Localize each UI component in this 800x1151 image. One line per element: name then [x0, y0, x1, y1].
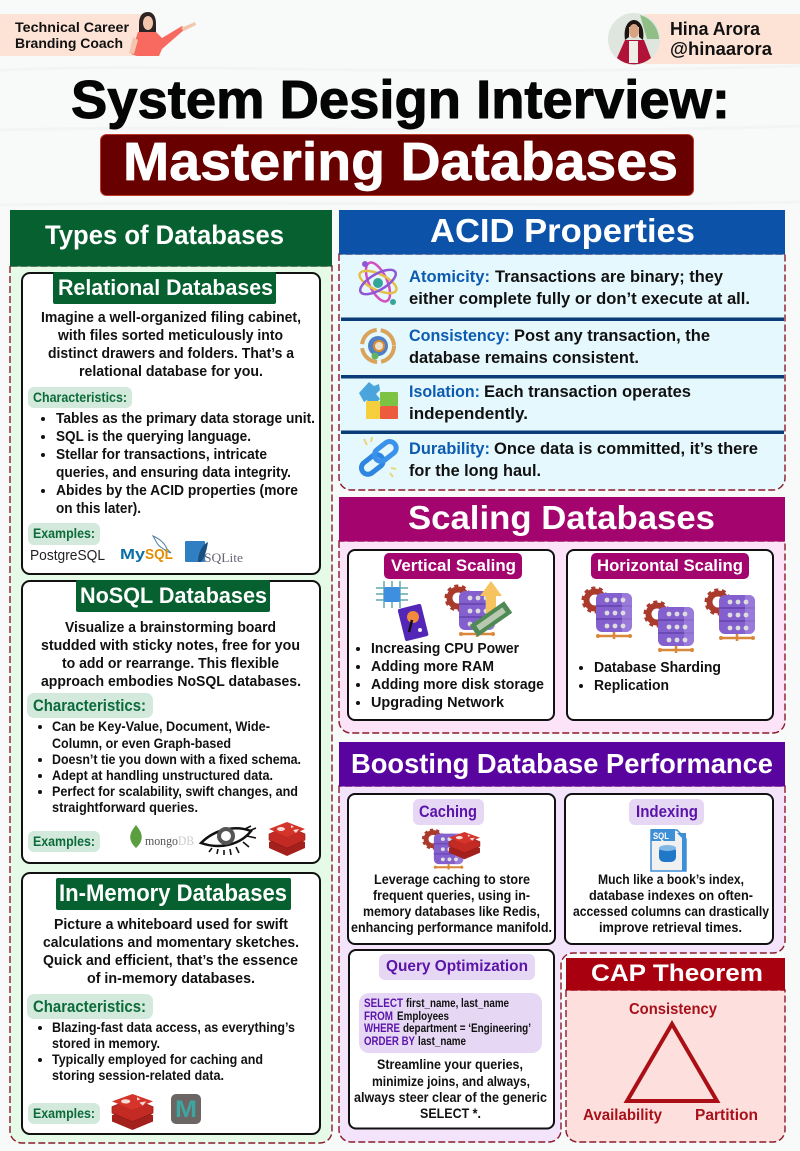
- card: in-memory databases: Quick and efficient, that’s the essence: [43, 952, 298, 969]
- panel: cap theorem: [566, 958, 785, 1142]
- card: in-memory databases: Characteristics:: [33, 998, 146, 1016]
- card: query optimization: [349, 950, 554, 1128]
- text: durability: for the long haul.: [409, 461, 541, 480]
- subtitle banner: Mastering Databases: [123, 132, 678, 192]
- icon: database servers: [583, 588, 755, 653]
- icon: cache server: [423, 830, 480, 870]
- code sample: WHERE: [364, 1023, 400, 1035]
- text: isolation: independently.: [409, 404, 528, 423]
- card: in-memory databases: In-Memory Databases: [59, 880, 287, 907]
- card: relational databases: Stellar for transactions, intricate: [56, 446, 267, 463]
- text: atomicity: either complete fully or don’t execute at all.: [409, 289, 750, 308]
- card: caching: frequent queries, using in-: [373, 887, 530, 903]
- badge: author: @hinaarora: [670, 39, 773, 59]
- triangle: [627, 1024, 717, 1101]
- card: vertical scaling: Increasing CPU Power: [371, 640, 519, 657]
- card: caching: enhancing performance manifold.: [351, 919, 552, 935]
- code sample: [359, 993, 542, 1053]
- icon: sql document: SQL: [653, 831, 669, 841]
- card: nosql databases: Visualize a brainstorming board: [65, 619, 276, 636]
- icon: hard disk: [397, 604, 429, 641]
- logo: redis: [269, 822, 305, 856]
- card: indexing: Indexing: [636, 803, 698, 821]
- card: in-memory databases: storing session-related data.: [52, 1067, 224, 1083]
- icon: atom: [356, 259, 400, 305]
- card: horizontal scaling: Replication: [594, 677, 669, 694]
- card: in-memory databases: of in-memory databases.: [87, 970, 255, 987]
- card: horizontal scaling: Database Sharding: [594, 659, 721, 676]
- card: relational databases: Characteristics:: [33, 389, 127, 405]
- card: relational databases: distinct drawers and folders. That’s a: [48, 345, 295, 362]
- card: vertical scaling: Adding more disk storage: [371, 676, 544, 693]
- card: indexing: database indexes on often-: [589, 887, 753, 903]
- card: caching: [348, 794, 555, 944]
- badge: technical career branding coach: Technical Career: [15, 19, 130, 35]
- text: isolation: [409, 382, 691, 423]
- text: durability: Once data is committed, it’s there: [494, 439, 758, 458]
- card: relational databases: Abides by the ACID properties (more: [56, 482, 298, 499]
- card: relational databases: with files sorted meticulously into: [57, 327, 283, 344]
- card: nosql databases: approach embodies NoSQL databases.: [41, 673, 301, 690]
- text: durability: [409, 439, 758, 480]
- card: relational databases: on this later).: [56, 500, 141, 517]
- card: nosql databases: Adept at handling unstructured data.: [52, 767, 273, 783]
- text: atomicity: Transactions are binary; they: [495, 267, 724, 286]
- icon: consistency gear: [362, 330, 394, 362]
- panel: acid properties: [339, 210, 785, 490]
- card: vertical scaling: Upgrading Network: [371, 694, 505, 711]
- text: consistency: Consistency:: [409, 326, 510, 345]
- card: nosql databases: NoSQL Databases: [80, 583, 267, 608]
- card: in-memory databases: [22, 873, 320, 1134]
- text: durability: Durability:: [409, 439, 490, 458]
- code sample: last_name: [418, 1036, 466, 1048]
- code sample: SELECT: [364, 998, 403, 1010]
- card: nosql databases: to add or rearrange. This flexible: [62, 655, 279, 672]
- icon: coach illustration: [129, 12, 196, 56]
- code sample: ORDER BY: [364, 1036, 415, 1048]
- card: nosql databases: Characteristics:: [33, 697, 146, 715]
- card: nosql databases: Doesn’t tie you down with a fixed schema.: [52, 751, 301, 767]
- card: nosql databases: Perfect for scalability, swift changes, and: [52, 783, 298, 799]
- text: atomicity: [409, 267, 750, 308]
- card: vertical scaling: Adding more RAM: [371, 658, 494, 675]
- card: vertical scaling: [348, 550, 554, 720]
- card: indexing: improve retrieval times.: [599, 919, 742, 935]
- logo: mysql: [120, 536, 173, 563]
- card: query optimization: always steer clear of the generic: [354, 1089, 547, 1105]
- icon: sql document: [651, 829, 686, 871]
- heading: scaling databases: Scaling Databases: [408, 499, 715, 536]
- logo: sqlite: [185, 541, 243, 565]
- logo: mongodb: DB: [178, 833, 194, 848]
- card: horizontal scaling: Horizontal Scaling: [597, 557, 743, 575]
- icon: cpu chip: [376, 581, 408, 608]
- card: caching: memory databases like Redis,: [363, 903, 540, 919]
- label: partition: Partition: [695, 1107, 758, 1124]
- text: isolation: Each transaction operates: [484, 382, 691, 401]
- badge: author: Hina Arora: [670, 19, 761, 39]
- logo: memcached: M: [175, 1096, 197, 1123]
- card: relational databases: Examples:: [33, 525, 95, 541]
- card: in-memory databases: calculations and momentary sketches.: [43, 934, 299, 951]
- code sample: FROM: [364, 1011, 393, 1023]
- logo: mysql: SQL: [145, 546, 173, 563]
- label: availability: Availability: [583, 1107, 662, 1124]
- heading: cap theorem: CAP Theorem: [591, 960, 763, 987]
- panel: boosting database performance: [339, 742, 785, 1142]
- badge: technical career branding coach: [0, 12, 196, 56]
- text: consistency: database remains consistent.: [409, 348, 639, 367]
- title: [71, 70, 730, 196]
- heading: types of databases: Types of Databases: [45, 220, 284, 250]
- card: indexing: accessed columns can drastically: [573, 903, 769, 919]
- logo: mysql: My: [120, 546, 146, 563]
- label: consistency: Consistency: [629, 1001, 717, 1018]
- card: indexing: Much like a book’s index,: [598, 871, 744, 887]
- card: in-memory databases: Picture a whiteboard used for swift: [54, 916, 288, 933]
- card: in-memory databases: Blazing-fast data access, as everything’s: [52, 1019, 295, 1035]
- logo: mongodb: mongo: [145, 833, 178, 848]
- card: indexing: [565, 794, 773, 944]
- card: vertical scaling: Vertical Scaling: [391, 557, 516, 575]
- code sample: department = ‘Engineering’: [403, 1023, 531, 1035]
- badge: author: [608, 13, 800, 65]
- text: atomicity: Atomicity:: [409, 267, 490, 286]
- badge: technical career branding coach: Branding Coach: [15, 35, 123, 51]
- heading: acid properties: ACID Properties: [430, 212, 695, 249]
- card: relational databases: SQL is the querying language.: [56, 428, 251, 445]
- card: in-memory databases: stored in memory.: [52, 1035, 160, 1051]
- logo: mongodb: [130, 825, 194, 848]
- logo: memcached: [171, 1094, 201, 1124]
- card: in-memory databases: Examples:: [33, 1105, 95, 1121]
- card: nosql databases: Column, or even Graph-based: [52, 735, 231, 751]
- panel: types of databases: [10, 210, 332, 1143]
- card: in-memory databases: Typically employed for caching and: [52, 1051, 263, 1067]
- logo: cassandra eye: [201, 826, 256, 855]
- card: nosql databases: studded with sticky notes, free for you: [41, 637, 300, 654]
- card: query optimization: Streamline your queries,: [377, 1056, 523, 1072]
- card: nosql databases: Can be Key-Value, Document, Wide-: [52, 718, 270, 734]
- card: relational databases: Relational Databases: [58, 275, 273, 300]
- card: relational databases: Imagine a well-organized filing cabinet,: [41, 309, 301, 326]
- card: nosql databases: [22, 580, 320, 863]
- code sample: first_name, last_name: [406, 998, 509, 1010]
- code sample: Employees: [397, 1011, 449, 1023]
- panel: scaling databases: [339, 497, 785, 733]
- card: relational databases: [22, 272, 320, 574]
- card: caching: Leverage caching to store: [374, 871, 530, 887]
- logo: sqlite: SQLite: [204, 550, 243, 565]
- card: relational databases: queries, and ensuring data integrity.: [56, 464, 291, 481]
- text: consistency: [409, 326, 710, 367]
- card: relational databases: Tables as the primary data storage unit.: [56, 410, 315, 427]
- text: consistency: Post any transaction, the: [514, 326, 710, 345]
- card: horizontal scaling: [567, 550, 773, 720]
- text: isolation: Isolation:: [409, 382, 480, 401]
- card: query optimization: Query Optimization: [386, 958, 528, 975]
- icon: chain link: [359, 437, 399, 477]
- title: System Design Interview:: [71, 70, 730, 130]
- logo: postgresql: PostgreSQL: [30, 547, 105, 564]
- card: nosql databases: Examples:: [33, 833, 95, 849]
- icon: author photo: [608, 13, 660, 65]
- card: caching: Caching: [419, 803, 477, 821]
- card: query optimization: SELECT *.: [420, 1105, 481, 1121]
- icon: puzzle: [359, 382, 398, 419]
- icon: server upgrade: [446, 581, 512, 637]
- card: query optimization: minimize joins, and always,: [372, 1073, 530, 1089]
- heading: boosting database performance: Boosting Database Performance: [351, 748, 773, 779]
- card: nosql databases: straightforward queries.: [52, 799, 198, 815]
- logo: redis: [112, 1094, 153, 1130]
- card: relational databases: relational database for you.: [79, 363, 263, 380]
